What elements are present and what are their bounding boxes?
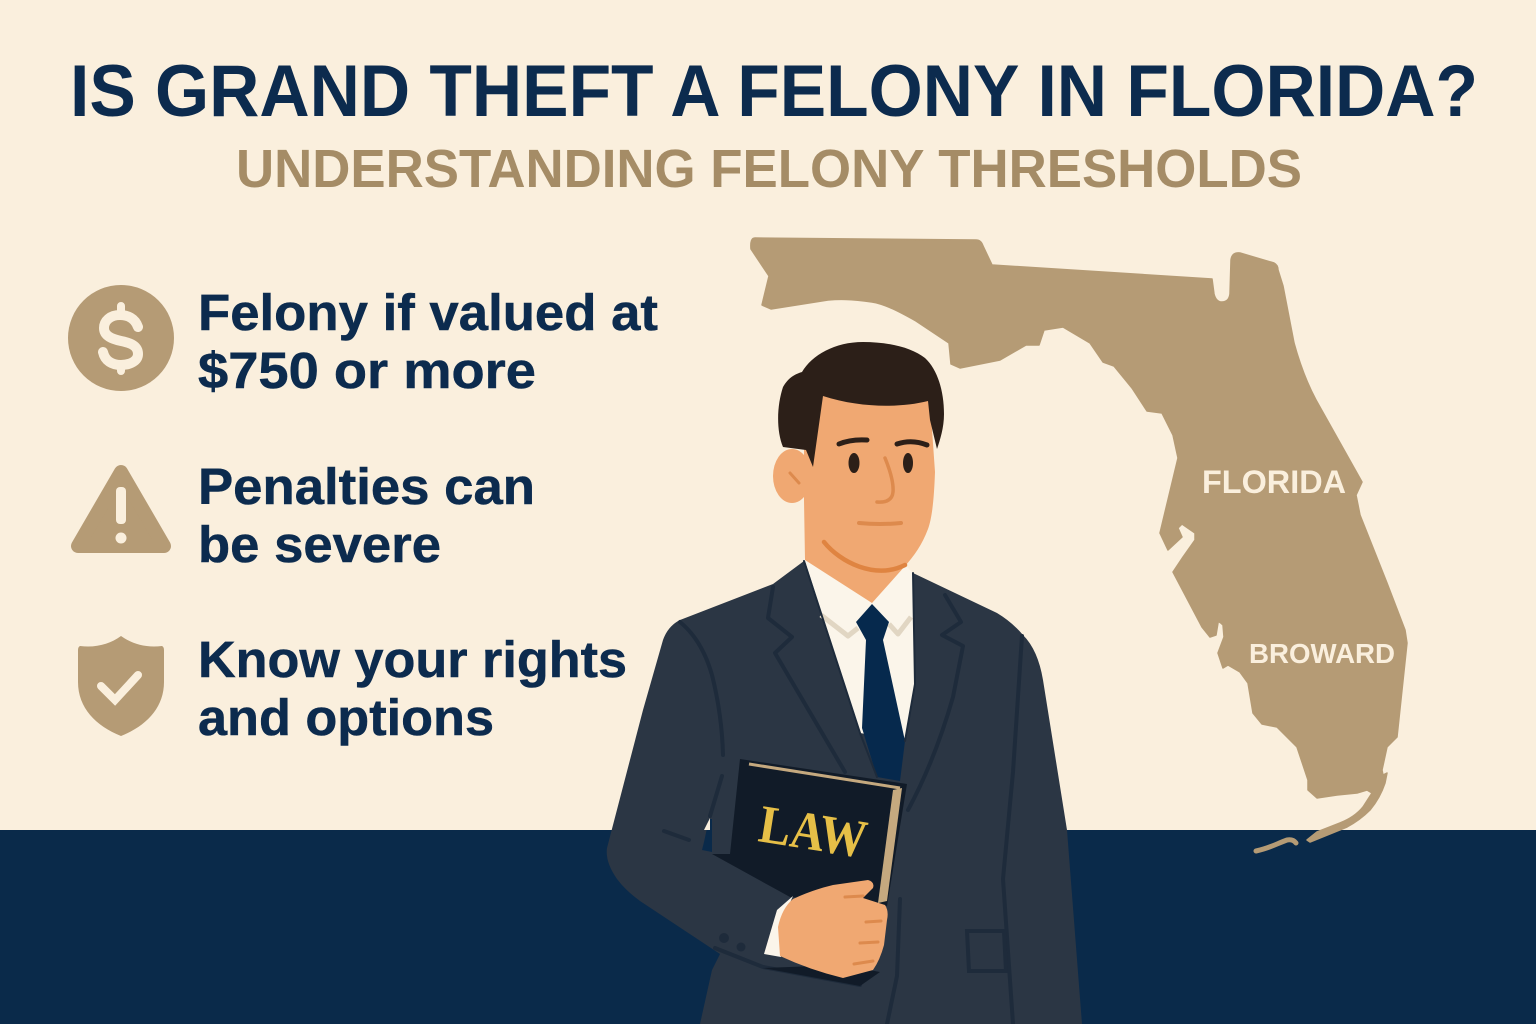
eyebrows (839, 440, 927, 445)
eyes (848, 453, 913, 473)
mouth (859, 523, 901, 524)
navy footer band (0, 830, 1536, 1024)
white shirt (804, 558, 915, 741)
state silhouette (751, 238, 1407, 842)
shirt cuff (764, 896, 793, 957)
icon: shield check (78, 636, 164, 736)
point: rights (78, 631, 627, 746)
hair (778, 342, 944, 467)
book spine edge (878, 788, 902, 903)
map of Florida (751, 238, 1407, 851)
key points panel (68, 284, 658, 746)
text: penalties severe: Penalties can (198, 458, 535, 515)
jaw line (824, 542, 905, 571)
LAW text: LAW (755, 794, 871, 870)
neck and face (804, 396, 935, 603)
law book (712, 759, 907, 906)
lawyer figure (607, 342, 1082, 1024)
label: BROWARD: BROWARD (1249, 638, 1395, 669)
ear (773, 449, 811, 503)
nose (877, 458, 893, 502)
jacket pocket (967, 931, 1006, 971)
label: FLORIDA: FLORIDA (1202, 464, 1346, 500)
icon: warning triangle (78, 472, 164, 546)
text: penalties severe: be severe (198, 516, 441, 573)
sleeve buttons (719, 933, 746, 952)
icon: dollar coin (68, 285, 174, 391)
text: know your rights: Know your rights (198, 631, 627, 688)
text: felony if valued: $750 or more (198, 342, 536, 399)
arm gap highlight (704, 818, 710, 830)
suit jacket (607, 561, 1082, 1024)
hand (778, 880, 888, 978)
lower keys (1256, 840, 1296, 851)
text: felony if valued: Felony if valued at (198, 284, 658, 341)
collar shadow (821, 615, 911, 636)
book top edge (749, 764, 900, 788)
necktie (856, 604, 905, 781)
point: penalties (78, 458, 535, 573)
point: felony threshold (68, 284, 658, 399)
book cover (712, 759, 907, 906)
subtitle: UNDERSTANDING FELONY THRESHOLDS (236, 139, 1302, 199)
jacket seams and lapels (664, 561, 1022, 1024)
text: know your rights: and options (198, 689, 494, 746)
book shadow below hand (763, 965, 880, 986)
title: IS GRAND THEFT A FELONY IN FLORIDA? (70, 51, 1478, 132)
arm gap (702, 819, 712, 852)
